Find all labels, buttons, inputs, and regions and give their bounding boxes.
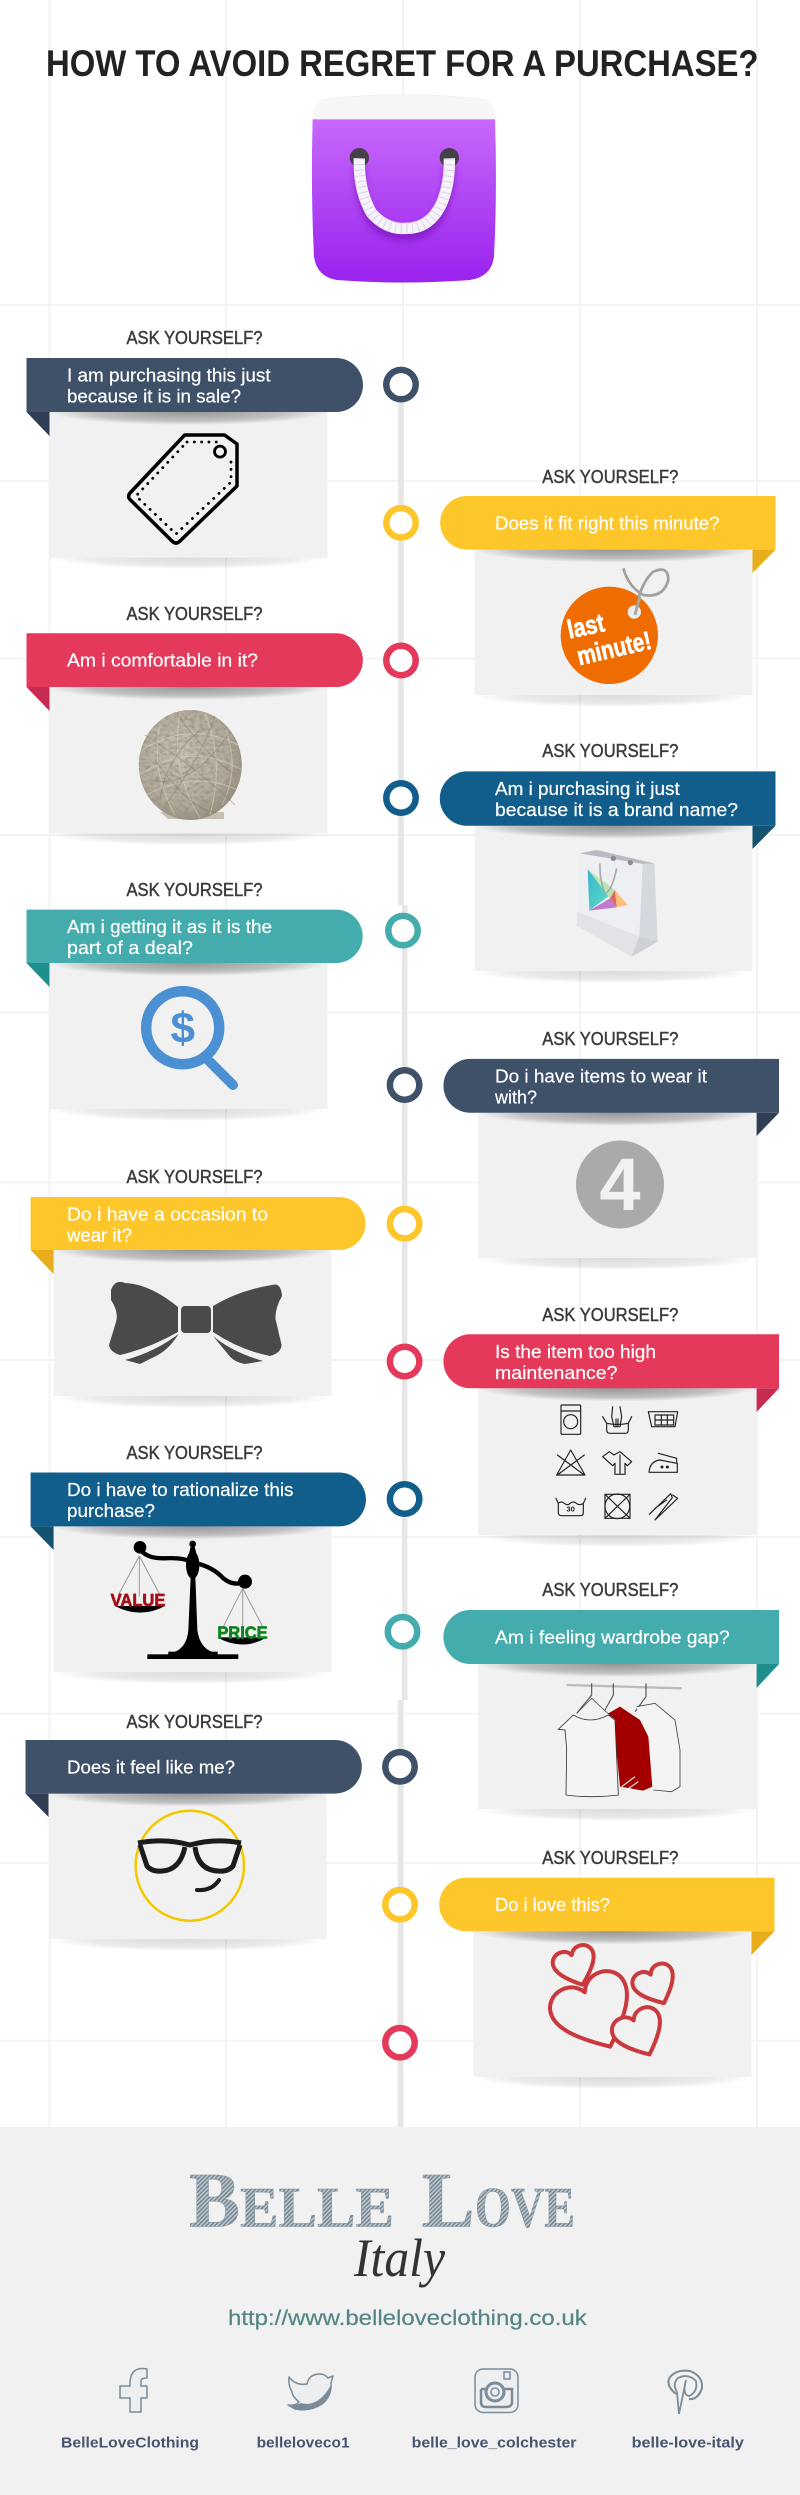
- question bubble: [443, 1610, 779, 1664]
- question bubble: Is the item too high: [495, 1342, 656, 1362]
- step: fit right: [440, 467, 776, 707]
- question bubble: Do i have items to wear it: [495, 1066, 707, 1086]
- icon: magnifier with dollar: [146, 991, 233, 1085]
- question bubble: Do i have a occasion to: [67, 1204, 268, 1224]
- social: pinterest: [632, 2371, 744, 2452]
- website url: http://www.belleloveclothing.co.uk: [228, 2307, 587, 2330]
- ask yourself label: ASK YOURSELF?: [126, 328, 262, 348]
- icon: ball of yarn: [139, 710, 242, 820]
- question bubble: Does it feel like me?: [67, 1757, 235, 1777]
- question bubble: [440, 496, 776, 550]
- step: love this: [439, 1848, 774, 2089]
- question bubble: [443, 1059, 779, 1113]
- question bubble: I am purchasing this just: [67, 366, 271, 386]
- step: rationalize: [31, 1443, 366, 1684]
- step: comfortable: [26, 604, 363, 845]
- step: wardrobe gap: [443, 1580, 779, 1821]
- ask yourself label: ASK YOURSELF?: [126, 1712, 262, 1732]
- question bubble: Do i have to rationalize this: [67, 1480, 294, 1500]
- question bubble: [26, 358, 363, 412]
- step: sale: [26, 328, 363, 569]
- icon: bow tie: [109, 1282, 282, 1364]
- icon: last minute tag: last: [564, 607, 607, 645]
- ask yourself label: ASK YOURSELF?: [542, 1029, 678, 1049]
- question bubble: [31, 1472, 366, 1526]
- social: facebook: [61, 2369, 199, 2452]
- question bubble: Am i getting it as it is the: [67, 917, 272, 937]
- question bubble: Am i feeling wardrobe gap?: [495, 1628, 730, 1648]
- icon: hearts: [544, 1942, 683, 2065]
- italy script: Italy: [353, 2228, 445, 2288]
- icon: value and price scales: [111, 1541, 268, 1659]
- question bubble: Am i purchasing it just: [495, 779, 680, 799]
- brand logo: ELLE: [240, 2176, 394, 2240]
- ask yourself label: ASK YOURSELF?: [542, 741, 678, 761]
- icon: purple shopping bag: [312, 95, 496, 282]
- step: high maintenance: [443, 1305, 779, 1547]
- question bubble: wear it?: [66, 1225, 132, 1245]
- question bubble: because it is in sale?: [67, 387, 241, 407]
- brand logo: OVE: [475, 2176, 575, 2240]
- brand logo: L: [422, 2156, 475, 2244]
- ask yourself label: ASK YOURSELF?: [126, 604, 262, 624]
- icon: magnifier with dollar: $: [170, 1004, 195, 1053]
- icon: play store bag: [577, 850, 658, 957]
- question bubble: part of a deal?: [67, 938, 193, 958]
- icon: laundry symbols: [556, 1405, 678, 1520]
- question bubble: [26, 910, 363, 963]
- social: twitter: [257, 2374, 350, 2452]
- question bubble: Does it fit right this minute?: [495, 513, 720, 533]
- question bubble: Am i comfortable in it?: [67, 651, 258, 671]
- question bubble: Do i love this?: [495, 1895, 610, 1915]
- icon: number four: [576, 1140, 664, 1228]
- icon: last minute tag: minute!: [574, 625, 654, 671]
- question bubble: [31, 1197, 365, 1250]
- icon: smiling face with glasses: [136, 1811, 244, 1921]
- ask yourself label: ASK YOURSELF?: [542, 1848, 678, 1868]
- ask yourself label: ASK YOURSELF?: [126, 1443, 262, 1463]
- step: occasion: [31, 1167, 365, 1408]
- timeline markers: [385, 370, 419, 2057]
- ask yourself label: ASK YOURSELF?: [126, 1167, 262, 1187]
- question bubble: [440, 771, 776, 826]
- question bubble: with?: [494, 1088, 537, 1108]
- icon: value and price scales: VALUE: [111, 1590, 165, 1610]
- icon: value and price scales: PRICE: [217, 1622, 268, 1642]
- step: deal: [26, 880, 363, 1121]
- ask yourself label: ASK YOURSELF?: [542, 1305, 678, 1325]
- ask yourself label: ASK YOURSELF?: [542, 467, 678, 487]
- step: items to wear: [443, 1029, 779, 1270]
- question bubble: [26, 1740, 362, 1794]
- ask yourself label: ASK YOURSELF?: [126, 880, 262, 900]
- question bubble: [439, 1878, 774, 1931]
- icon: laundry symbols: 30: [566, 1505, 575, 1514]
- timeline: [385, 370, 419, 2127]
- question bubble: [443, 1334, 779, 1388]
- brand logo: [189, 2156, 575, 2244]
- social: facebook: BelleLoveClothing: [61, 2436, 199, 2452]
- social: instagram: [412, 2369, 577, 2452]
- social: instagram: belle_love_colchester: [412, 2436, 577, 2452]
- question bubble: maintenance?: [495, 1363, 618, 1383]
- step: feels like me: [26, 1712, 362, 1951]
- icon: price tag: [129, 435, 237, 543]
- ask yourself label: ASK YOURSELF?: [542, 1580, 678, 1600]
- step: brand name: [440, 741, 776, 983]
- footer: [0, 2127, 800, 2495]
- question bubble: [26, 633, 363, 687]
- question bubble: because it is a brand name?: [495, 800, 738, 820]
- social: twitter: belleloveco1: [257, 2436, 350, 2452]
- question bubble: purchase?: [67, 1501, 155, 1521]
- social: pinterest: belle-love-italy: [632, 2436, 744, 2452]
- icon: clothes on a rail: [558, 1683, 682, 1797]
- icon: last minute tag: [561, 568, 668, 684]
- icon: number four: 4: [599, 1143, 641, 1226]
- brand logo: B: [189, 2156, 240, 2244]
